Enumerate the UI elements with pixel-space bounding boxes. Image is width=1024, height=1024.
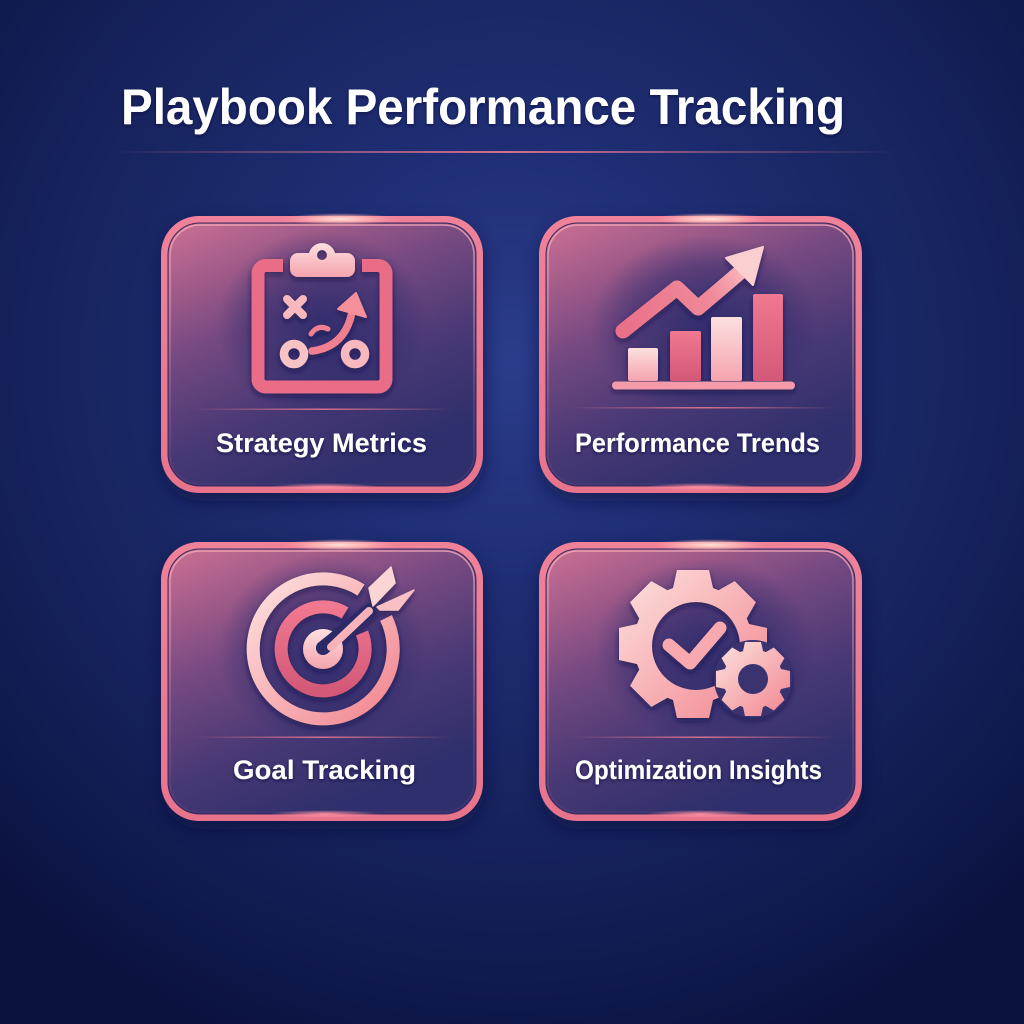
icon: target with arrow <box>253 567 414 719</box>
label: Goal Tracking: Goal Tracking <box>233 755 416 785</box>
panel: Performance Trends <box>539 213 862 501</box>
label: Strategy Metrics: Strategy Metrics <box>216 428 427 458</box>
icon: gears with check mark <box>619 570 792 718</box>
label: Performance Trends: Performance Trends <box>575 428 820 458</box>
title: Playbook Performance Tracking <box>121 79 845 135</box>
icon: rising bar chart with arrow <box>612 247 795 390</box>
panel: Strategy Metrics <box>161 213 483 501</box>
icon: clipboard play diagram <box>258 243 386 387</box>
panel: Goal Tracking <box>161 539 483 829</box>
panel: Optimization Insights <box>539 539 862 829</box>
label: Optimization Insights: Optimization Insights <box>575 755 822 785</box>
